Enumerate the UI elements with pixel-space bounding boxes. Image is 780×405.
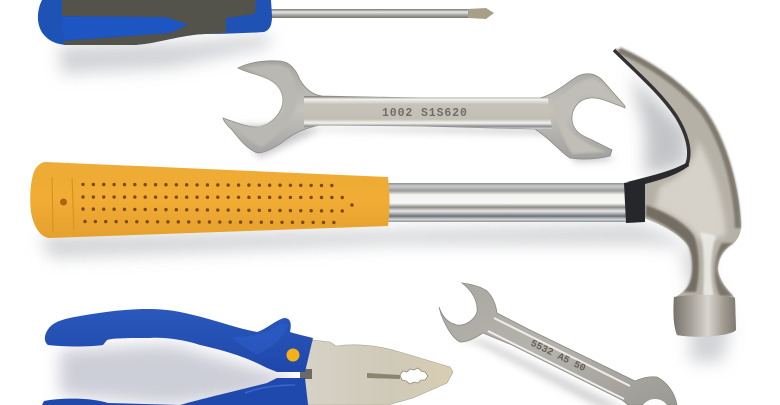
hammer neck highlight [700,232,716,296]
hammer rubber shoulder [627,162,689,184]
screwdriver shaft [270,9,468,18]
screwdriver [38,0,494,45]
pliers serrated jaw [400,368,428,384]
screwdriver tip [468,8,494,19]
small wrench bright ridge [494,318,630,386]
claw hammer [30,48,741,337]
pliers metal head [304,340,453,405]
small angled wrench [439,283,677,405]
pliers dark joint [300,369,312,379]
hammer head [615,48,741,337]
pliers upper blue handle [45,309,313,372]
hammer steel shaft [386,183,628,222]
hammer neck left shading [646,205,699,292]
small wrench body [439,283,677,405]
screwdriver handle [38,0,272,45]
hammer cheek highlight [655,140,726,240]
wrench stamped marking: 1002 S1S620 [382,107,468,120]
hammer poll [673,295,736,337]
hammer neck right shading [715,243,733,296]
pliers upper handle ridge [232,322,288,354]
hammer outer rim shading [619,50,738,228]
grip dots [83,184,353,222]
pliers lower blue handle [42,378,308,405]
pliers yellow dot [286,348,300,362]
wrench body [223,61,625,159]
screwdriver dark grip [62,0,256,45]
small wrench mouth of far head [643,399,667,405]
grip hole [60,198,67,206]
pliers lower handle highlight [245,385,295,393]
hammer claw dark edge [614,50,689,164]
wrench right head shading [552,78,618,154]
grip end grooves [52,177,74,232]
combination pliers [42,309,453,405]
top open-end wrench [223,61,625,159]
pliers centre slot [367,373,400,379]
hammer yellow grip [30,162,390,238]
hammer collar [624,180,645,223]
small wrench lower ridge [488,331,624,399]
wrench shaft bands [304,96,552,129]
small wrench stamped marking: 5532 A5 50 [528,339,587,375]
wrench left head shading [232,65,297,147]
screwdriver blue inlay [62,17,187,40]
